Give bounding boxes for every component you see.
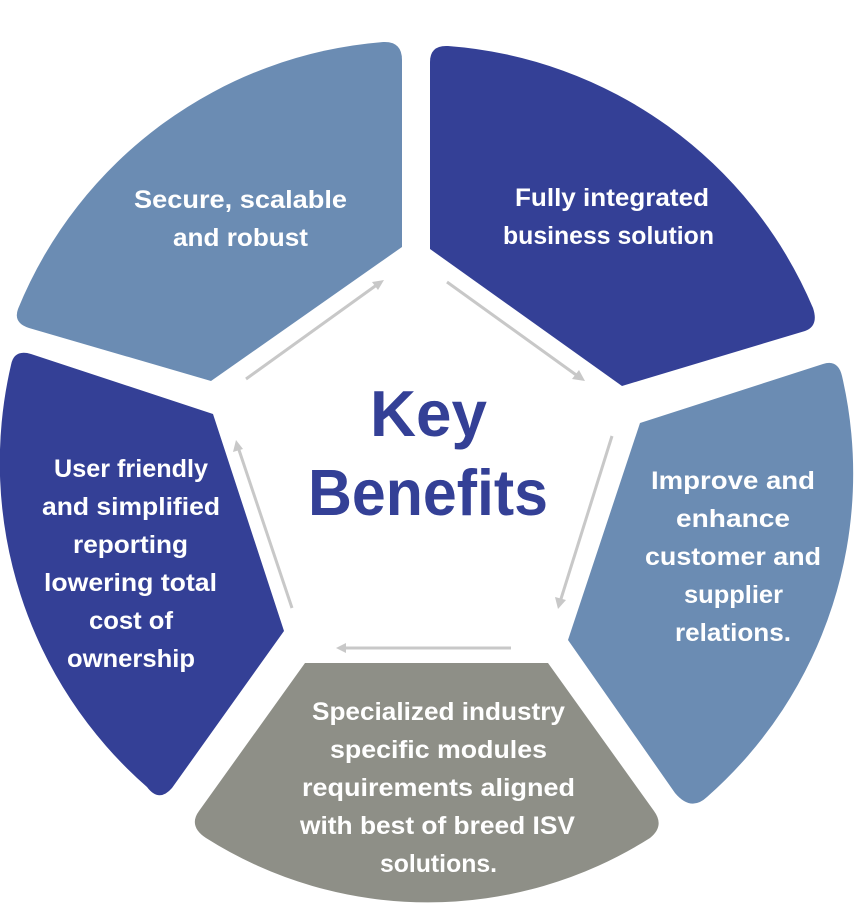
panel: fully integrated business solution: business solution: [503, 222, 714, 250]
panel: fully integrated business solution: Fully integrated: [515, 184, 709, 212]
panel: user friendly and simplified reporting: User friendly: [54, 455, 208, 483]
title: Key Benefits: Key: [370, 377, 487, 450]
panel: improve and enhance customer and supplier relations: customer and: [645, 543, 821, 571]
panel: specialized industry specific modules: solutions.: [380, 850, 497, 878]
arrow: to improve and enhance: [447, 282, 585, 381]
panel: specialized industry specific modules: specific modules: [330, 736, 547, 764]
panel: improve and enhance customer and supplier relations: supplier: [684, 581, 783, 609]
title: Key Benefits: Benefits: [308, 456, 548, 529]
panel: improve and enhance customer and supplier relations: enhance: [676, 505, 790, 533]
panel: user friendly and simplified reporting: reporting: [73, 531, 188, 559]
panel: user friendly and simplified reporting: [0, 353, 284, 795]
panel: specialized industry specific modules: Specialized industry: [312, 698, 565, 726]
title: Key Benefits: [308, 377, 548, 529]
panel: fully integrated business solution: [430, 46, 815, 386]
panel: user friendly and simplified reporting: lowering total: [44, 569, 217, 597]
arrow: to secure, scalable: [233, 440, 292, 608]
panel: specialized industry specific modules: [195, 663, 659, 902]
arrow: to user friendly: [336, 643, 511, 653]
panel: improve and enhance customer and supplier relations: Improve and: [651, 467, 815, 495]
panel: user friendly and simplified reporting: ownership: [67, 645, 195, 673]
panel: secure, scalable and robust: Secure, scalable: [134, 186, 347, 214]
panel: improve and enhance customer and supplier relations: [568, 363, 853, 804]
arrow: to specialized industry: [555, 436, 612, 609]
panel: secure, scalable and robust: [17, 42, 402, 381]
panel: specialized industry specific modules: requirements aligned: [302, 774, 575, 802]
panel: secure, scalable and robust: and robust: [173, 224, 309, 252]
panel: user friendly and simplified reporting: and simplified: [42, 493, 220, 521]
arrow: to fully integrated: [246, 280, 384, 379]
panel: specialized industry specific modules: with best of breed ISV: [299, 812, 575, 840]
panel: improve and enhance customer and supplier relations: relations.: [675, 619, 791, 647]
panel: user friendly and simplified reporting: cost of: [89, 607, 174, 635]
